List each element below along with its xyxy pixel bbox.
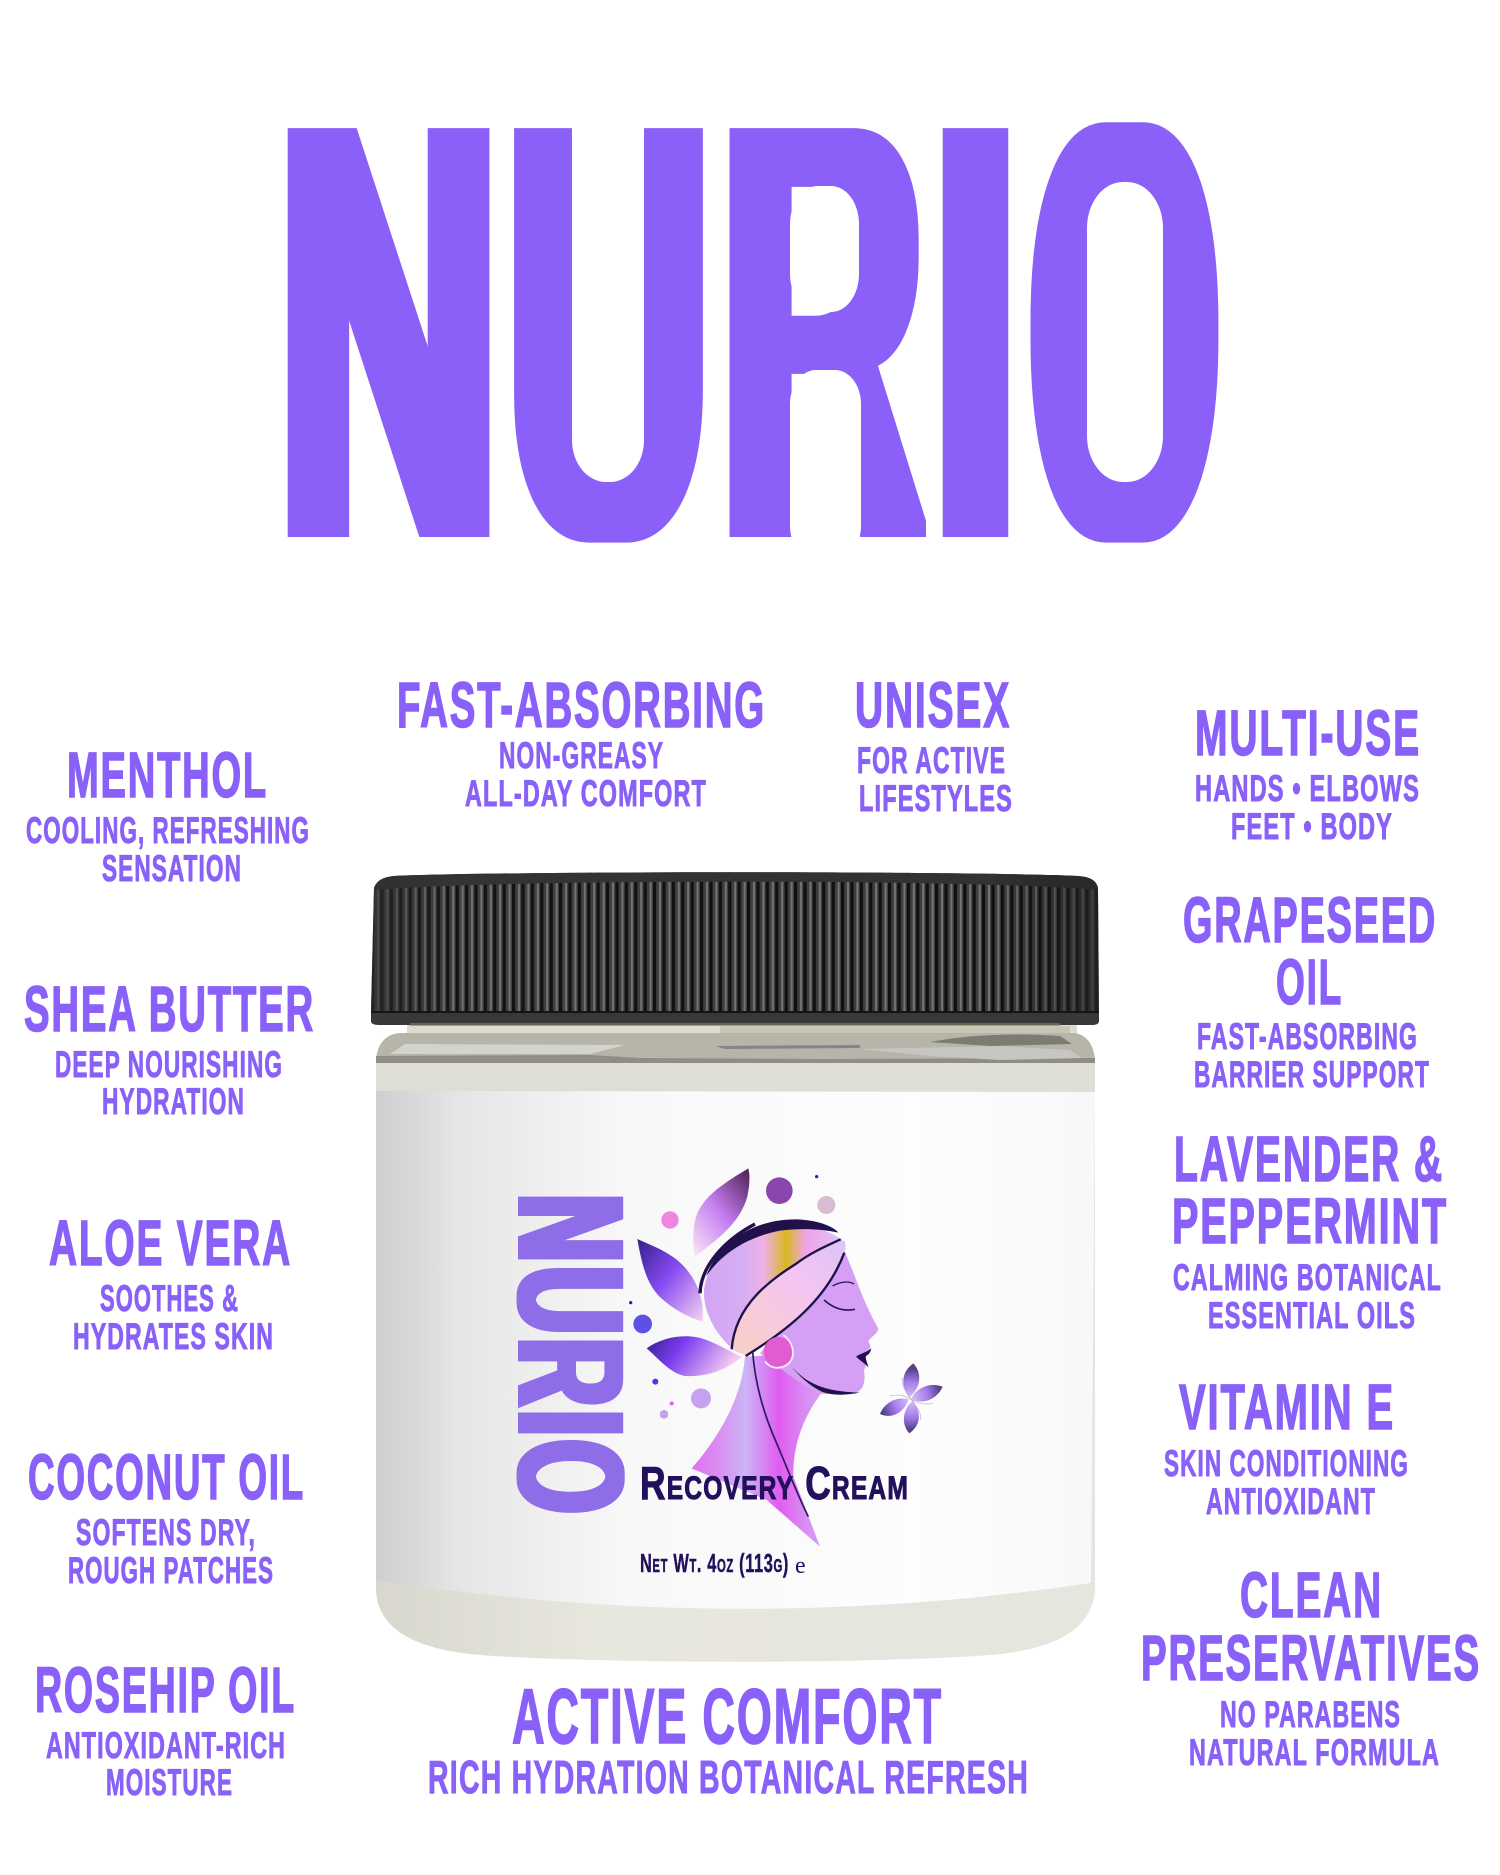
callout: rosehip oil: MOISTURE [106, 1762, 233, 1803]
jawline [792, 1367, 860, 1395]
product name: Recovery Cream [640, 1457, 909, 1509]
label artwork [487, 1168, 943, 1579]
title: NURIO: N [282, 13, 495, 651]
callout: lavender and peppermint [1172, 1123, 1448, 1336]
callout: unisex: FOR ACTIVE [857, 740, 1006, 781]
callout: unisex [855, 669, 1013, 819]
callout: aloe vera: ALOE VERA [49, 1207, 292, 1279]
face [760, 1250, 878, 1394]
callout: shea butter: HYDRATION [102, 1081, 245, 1122]
leaves [693, 1168, 749, 1257]
net weight: Net Wt. 4oz (113g) [640, 1548, 789, 1578]
neck line [753, 1352, 808, 1517]
label NURIO vertical wordmark: NURIO [487, 1194, 655, 1517]
product jar [371, 872, 1099, 1662]
head [700, 1219, 878, 1517]
callout: grapeseed oil: OIL [1276, 946, 1343, 1018]
jar cap [371, 872, 1099, 1026]
callout: clean preservatives [1141, 1559, 1481, 1773]
callout: menthol: COOLING, REFRESHING [26, 810, 310, 851]
callout: coconut oil: ROUGH PATCHES [68, 1550, 274, 1591]
woman portrait logo [629, 1168, 943, 1547]
text: O [1038, 13, 1210, 651]
title: NURIO: I [933, 13, 1018, 651]
callout: aloe vera [49, 1207, 292, 1357]
callout: shea butter [24, 973, 315, 1122]
callout: rosehip oil: ROSEHIP OIL [35, 1654, 296, 1726]
jar body [376, 1063, 1095, 1662]
callout: unisex: UNISEX [855, 669, 1011, 741]
callout: unisex: LIFESTYLES [859, 778, 1013, 819]
callout: clean preservatives: CLEAN [1240, 1559, 1383, 1631]
neck [692, 1353, 821, 1547]
glass shoulder [376, 1033, 1095, 1064]
callout: coconut oil: SOFTENS DRY, [76, 1512, 256, 1553]
callout: rosehip oil [35, 1654, 296, 1803]
title: NURIO [282, 13, 1210, 651]
callout: fast-absorbing [397, 669, 766, 814]
butterfly [880, 1363, 943, 1433]
turban band [732, 1239, 845, 1355]
callout: coconut oil [28, 1441, 305, 1591]
callout: menthol: MENTHOL [67, 739, 268, 811]
callout: rosehip oil: ANTIOXIDANT-RICH [46, 1725, 286, 1766]
eye and brow [824, 1300, 855, 1310]
jar label [376, 1091, 1095, 1609]
lips [856, 1348, 871, 1367]
callout: fast-absorbing: FAST-ABSORBING [397, 669, 766, 741]
callout: grapeseed oil [1183, 884, 1437, 1095]
callout: menthol: SENSATION [102, 848, 242, 889]
callout: vitamin e [1164, 1371, 1409, 1522]
title: NURIO: U [512, 13, 705, 651]
callout: active comfort [428, 1672, 1029, 1803]
callout: fast-absorbing: ALL-DAY COMFORT [465, 773, 707, 814]
decorative dots [661, 1211, 679, 1229]
jar neck [407, 1020, 1077, 1036]
callout: coconut oil: COCONUT OIL [28, 1441, 305, 1513]
callout: shea butter: DEEP NOURISHING [55, 1044, 283, 1085]
callout: aloe vera: SOOTHES & [100, 1278, 239, 1319]
callout: vitamin e: ANTIOXIDANT [1206, 1481, 1376, 1522]
callout: fast-absorbing: NON-GREASY [499, 735, 664, 776]
title: NURIO: R [726, 13, 920, 651]
cream band [376, 1063, 1095, 1093]
callout: active comfort: ACTIVE COMFORT [512, 1672, 943, 1760]
hair lines [706, 1219, 839, 1277]
callout: aloe vera: HYDRATES SKIN [73, 1316, 274, 1357]
callout: shea butter: SHEA BUTTER [24, 973, 315, 1045]
estimated sign: e [795, 1553, 806, 1579]
earring [764, 1337, 793, 1366]
turban [704, 1225, 845, 1355]
callout: active comfort: RICH HYDRATION BOTANICAL REFRESH [428, 1751, 1029, 1803]
callout: multi-use: FEET • BODY [1231, 806, 1393, 847]
callout: multi-use [1195, 697, 1421, 847]
callout: menthol [26, 739, 310, 889]
